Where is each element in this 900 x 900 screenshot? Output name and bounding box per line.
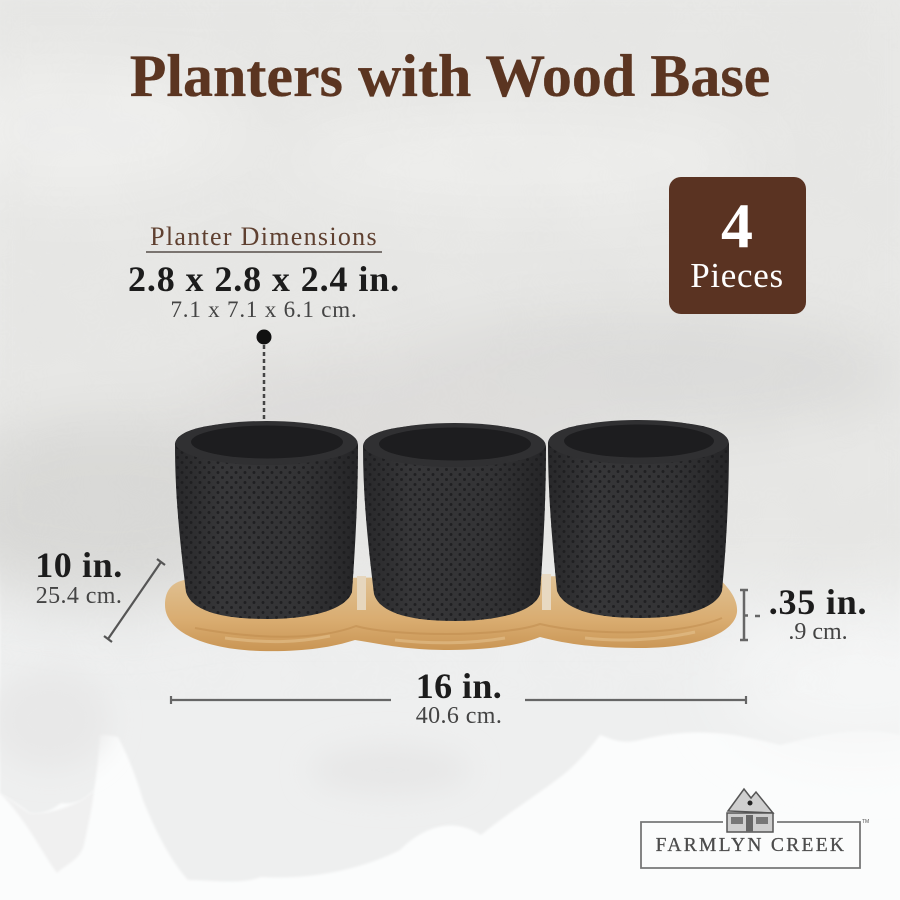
planter dimensions callout <box>128 222 400 419</box>
title: Planters with Wood Base <box>130 43 770 109</box>
planter: middle <box>363 423 546 621</box>
depth centimetres: 25.4 cm. <box>36 583 122 609</box>
planter: left <box>175 421 358 619</box>
height inches: .35 in. <box>769 582 867 622</box>
height arrow <box>740 588 760 642</box>
width arrow <box>170 696 748 704</box>
badge: 4 pieces <box>669 177 806 314</box>
height measurement <box>740 582 867 645</box>
badge label: Pieces <box>690 256 784 295</box>
depth measurement <box>35 545 166 643</box>
callout heading: Planter Dimensions <box>150 222 378 251</box>
depth arrow <box>103 558 166 643</box>
leader line with dot <box>256 330 272 419</box>
logo house icon <box>640 788 869 869</box>
planter: right <box>548 420 729 618</box>
badge number: 4 <box>721 190 753 261</box>
heading underline <box>146 251 382 252</box>
wood base <box>165 574 737 651</box>
width centimetres: 40.6 cm. <box>416 703 502 729</box>
width inches: 16 in. <box>416 666 502 706</box>
depth inches: 10 in. <box>35 545 123 585</box>
centimetres value: 7.1 x 7.1 x 6.1 cm. <box>170 297 358 322</box>
logo house icon: TM <box>862 819 869 825</box>
logo wordmark: FARMLYN CREEK <box>656 835 846 856</box>
inches value: 2.8 x 2.8 x 2.4 in. <box>128 259 400 299</box>
height centimetres: .9 cm. <box>788 619 848 645</box>
width measurement <box>170 666 748 729</box>
brand logo <box>640 788 869 869</box>
